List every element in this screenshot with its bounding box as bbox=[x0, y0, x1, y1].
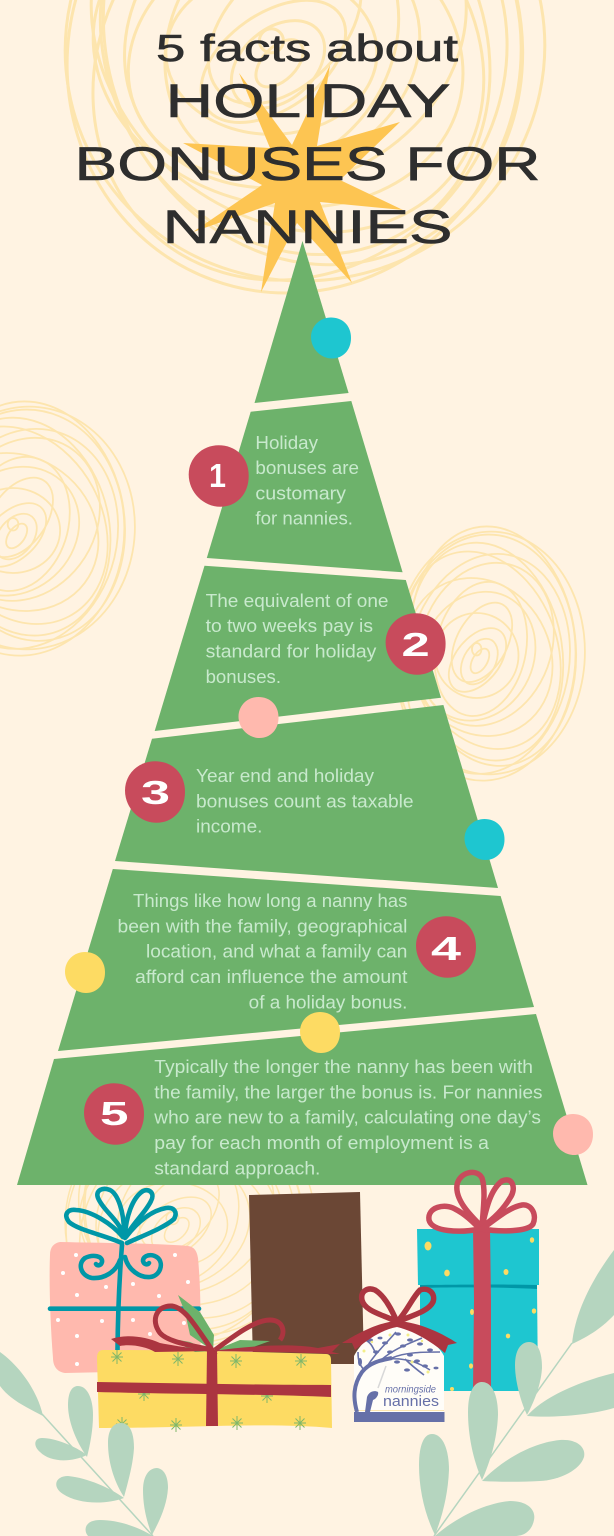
icon: star tree topper bbox=[183, 65, 403, 292]
logo tree bbox=[354, 1332, 440, 1412]
number badge 2 bbox=[386, 613, 446, 675]
logo wordmark: morningside bbox=[385, 1384, 436, 1396]
christmas tree bbox=[17, 241, 588, 1185]
title: HOLIDAY bbox=[166, 75, 450, 128]
number badge 2: 2 bbox=[402, 626, 430, 663]
fact 5 text: pay for each month of employment is a bbox=[154, 1133, 490, 1153]
present: brown box bbox=[249, 1192, 364, 1364]
present: pink with teal bow bbox=[50, 1189, 201, 1373]
fact 4 text bbox=[118, 891, 407, 1012]
fact 1 bbox=[189, 433, 359, 528]
number badge 5: 5 bbox=[100, 1095, 128, 1132]
fact 3 bbox=[125, 761, 414, 837]
ornaments bbox=[65, 318, 593, 1155]
fact 5 text: the family, the larger the bonus is. For nannies bbox=[154, 1082, 543, 1102]
fact 5 bbox=[84, 1057, 542, 1178]
leaves: bottom right bbox=[419, 1250, 614, 1536]
fact 2 text: standard for holiday bbox=[206, 641, 376, 661]
number badge 4 bbox=[416, 916, 476, 978]
scribble: behind presents bbox=[32, 1064, 340, 1387]
number badge 3: 3 bbox=[141, 774, 170, 811]
title: BONUSES FOR bbox=[74, 138, 540, 191]
fact 5 text: standard approach. bbox=[154, 1158, 320, 1178]
number badge 4: 4 bbox=[431, 930, 462, 967]
fact 4 text: afford can influence the amount bbox=[135, 967, 407, 987]
scribble: top bbox=[1, 0, 593, 365]
fact 4 bbox=[118, 891, 476, 1012]
number badge 3 bbox=[125, 761, 185, 823]
title: 5 facts about bbox=[156, 28, 459, 70]
fact 1 text: for nannies. bbox=[255, 508, 353, 528]
title bbox=[74, 28, 540, 254]
fact 2 text: to two weeks pay is bbox=[206, 616, 373, 636]
fact 1 text: Holiday bbox=[255, 433, 318, 453]
fact 3 text: bonuses count as taxable bbox=[196, 791, 414, 811]
fact 1 text: customary bbox=[255, 483, 346, 503]
logo wordmark: nannies bbox=[383, 1393, 439, 1410]
fact 2 text bbox=[206, 591, 388, 687]
logo red bow bbox=[342, 1289, 457, 1353]
fact 4 text: Things like how long a nanny has bbox=[133, 891, 407, 911]
fact 3 text: Year end and holiday bbox=[196, 766, 374, 786]
fact 4 text: location, and what a family can bbox=[146, 942, 407, 962]
title: NANNIES bbox=[162, 201, 452, 254]
fact 2 text: bonuses. bbox=[206, 667, 281, 687]
fact 1 text: bonuses are bbox=[255, 458, 359, 478]
number badge 1 bbox=[189, 445, 249, 507]
fact 2 text: The equivalent of one bbox=[206, 591, 388, 611]
number badge 5 bbox=[84, 1083, 144, 1145]
fact 4 text: been with the family, geographical bbox=[118, 916, 407, 936]
fact 1 text bbox=[255, 433, 359, 528]
fact 5 text bbox=[153, 1057, 542, 1178]
fact 5 text: Typically the longer the nanny has been with bbox=[154, 1057, 533, 1077]
scribble: right bbox=[370, 495, 604, 818]
number badge 1: 1 bbox=[209, 457, 226, 494]
present: yellow with red ribbon bbox=[97, 1295, 340, 1432]
fact 3 text bbox=[196, 766, 414, 837]
leaves: bottom left bbox=[0, 1352, 168, 1536]
fact 4 text: of a holiday bonus. bbox=[249, 992, 407, 1012]
fact 2 bbox=[206, 591, 446, 687]
logo wordmark bbox=[383, 1384, 439, 1410]
scribble: left bbox=[0, 370, 156, 693]
fact 3 text: income. bbox=[196, 817, 262, 837]
logo: morningside nannies bbox=[342, 1289, 457, 1422]
present: cyan with red bow bbox=[417, 1172, 539, 1391]
fact 5 text: who are new to a family, calculating one day’s bbox=[153, 1108, 541, 1128]
